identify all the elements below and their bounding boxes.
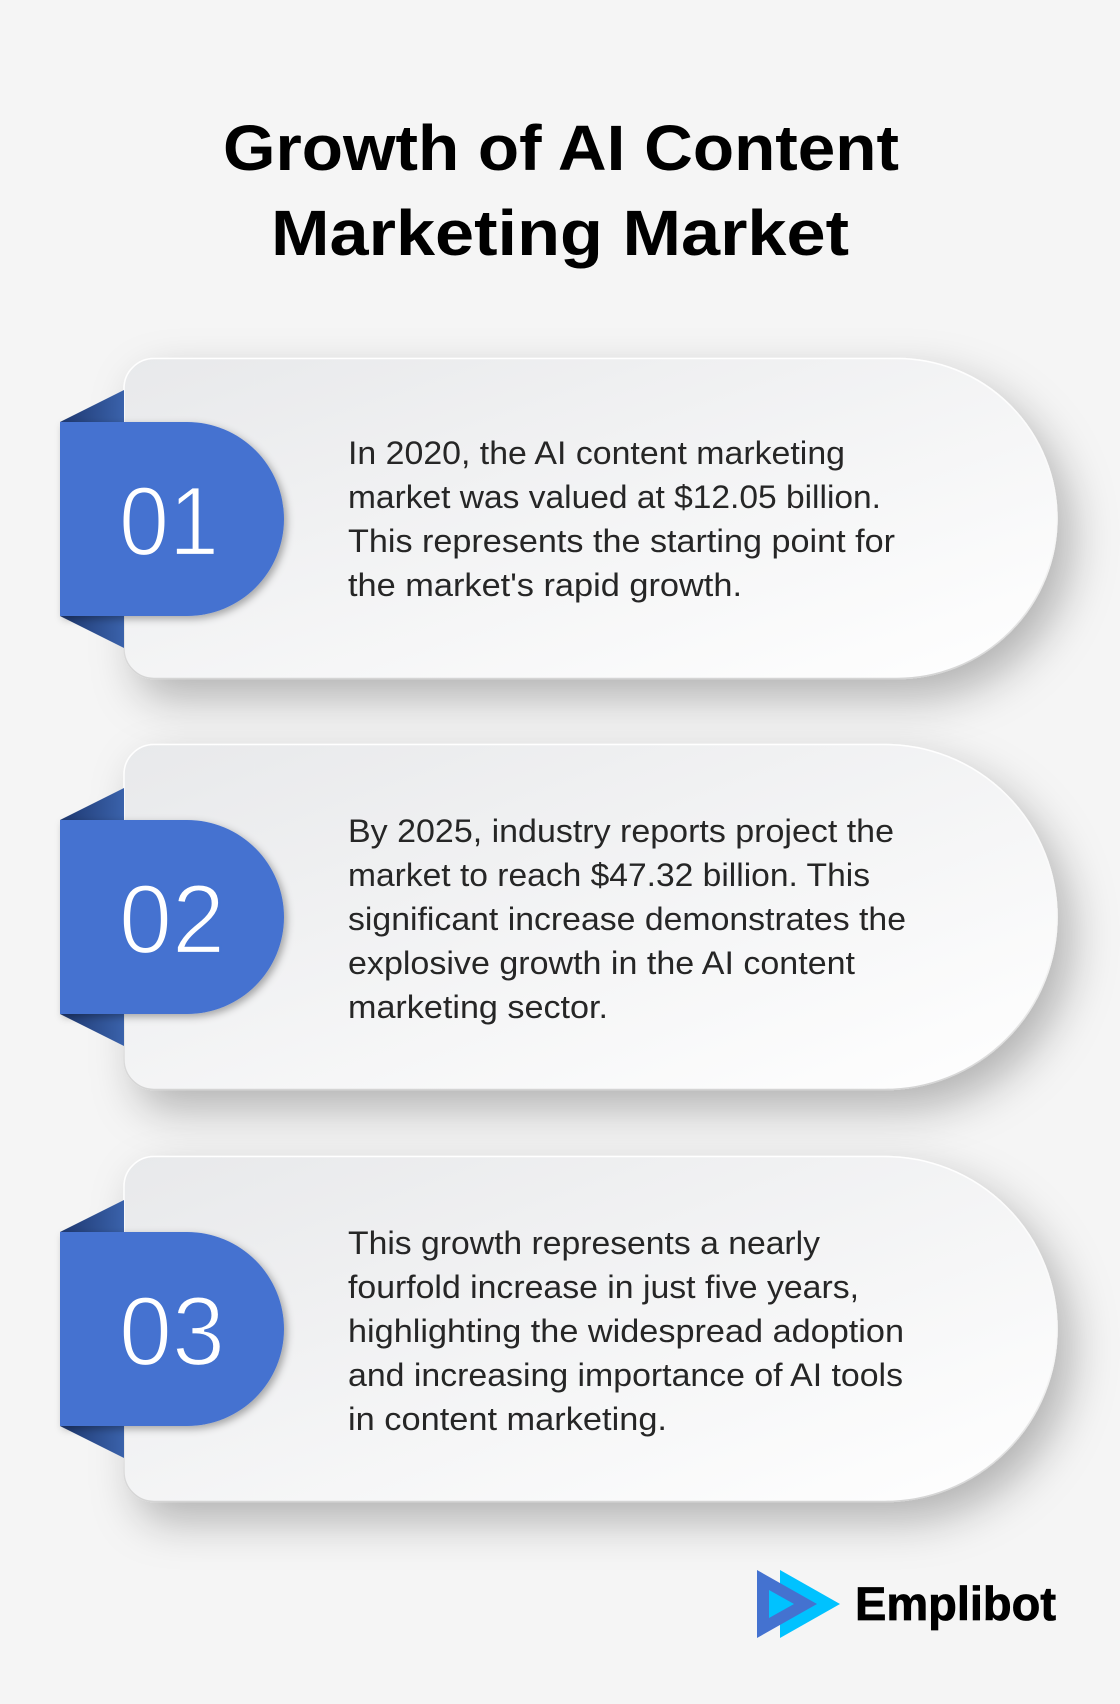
text 03: in content marketing. bbox=[348, 1401, 667, 1437]
title: Marketing Market bbox=[271, 197, 849, 269]
fold: lower 03 bbox=[60, 1426, 124, 1458]
text 01: This represents the starting point for bbox=[348, 523, 895, 559]
fold: upper 01 bbox=[60, 390, 124, 422]
badge 01 bbox=[60, 422, 284, 616]
number 01: 01 bbox=[119, 466, 219, 576]
text 03: highlighting the widespread adoption bbox=[348, 1313, 904, 1349]
fold: upper 02 bbox=[60, 788, 124, 820]
text 02: marketing sector. bbox=[348, 989, 608, 1025]
card 02 shape bbox=[124, 744, 1057, 1090]
fold: upper 03 bbox=[60, 1200, 124, 1232]
text 02: explosive growth in the AI content bbox=[348, 945, 855, 981]
panel: step 03 bbox=[60, 1156, 1057, 1502]
badge 02 bbox=[60, 820, 284, 1014]
wordmark: Emplibot bbox=[855, 1577, 1056, 1630]
text 01: In 2020, the AI content marketing bbox=[348, 435, 845, 471]
panel: step 01 bbox=[60, 358, 1057, 678]
icon: play triangles bbox=[757, 1570, 840, 1638]
text 03 bbox=[348, 1225, 904, 1437]
panel: step 02 bbox=[60, 744, 1057, 1090]
text 02: significant increase demonstrates the bbox=[348, 901, 906, 937]
number 02: 02 bbox=[119, 864, 225, 974]
text 01: market was valued at $12.05 billion. bbox=[348, 479, 881, 515]
title bbox=[223, 112, 899, 269]
text 02: By 2025, industry reports project the bbox=[348, 813, 894, 849]
logo: Emplibot bbox=[757, 1570, 1056, 1638]
text 03: This growth represents a nearly bbox=[348, 1225, 821, 1261]
text 02 bbox=[348, 813, 906, 1025]
text 02: market to reach $47.32 billion. This bbox=[348, 857, 870, 893]
card 03 shape bbox=[124, 1156, 1057, 1502]
fold: lower 02 bbox=[60, 1014, 124, 1046]
number 03: 03 bbox=[119, 1276, 225, 1386]
badge 03 bbox=[60, 1232, 284, 1426]
text 03: and increasing importance of AI tools bbox=[348, 1357, 903, 1393]
text 01 bbox=[348, 435, 895, 603]
card 01 shape bbox=[124, 358, 1057, 678]
title: Growth of AI Content bbox=[223, 112, 899, 184]
text 03: fourfold increase in just five years, bbox=[348, 1269, 859, 1305]
fold: lower 01 bbox=[60, 616, 124, 648]
text 01: the market's rapid growth. bbox=[348, 567, 742, 603]
